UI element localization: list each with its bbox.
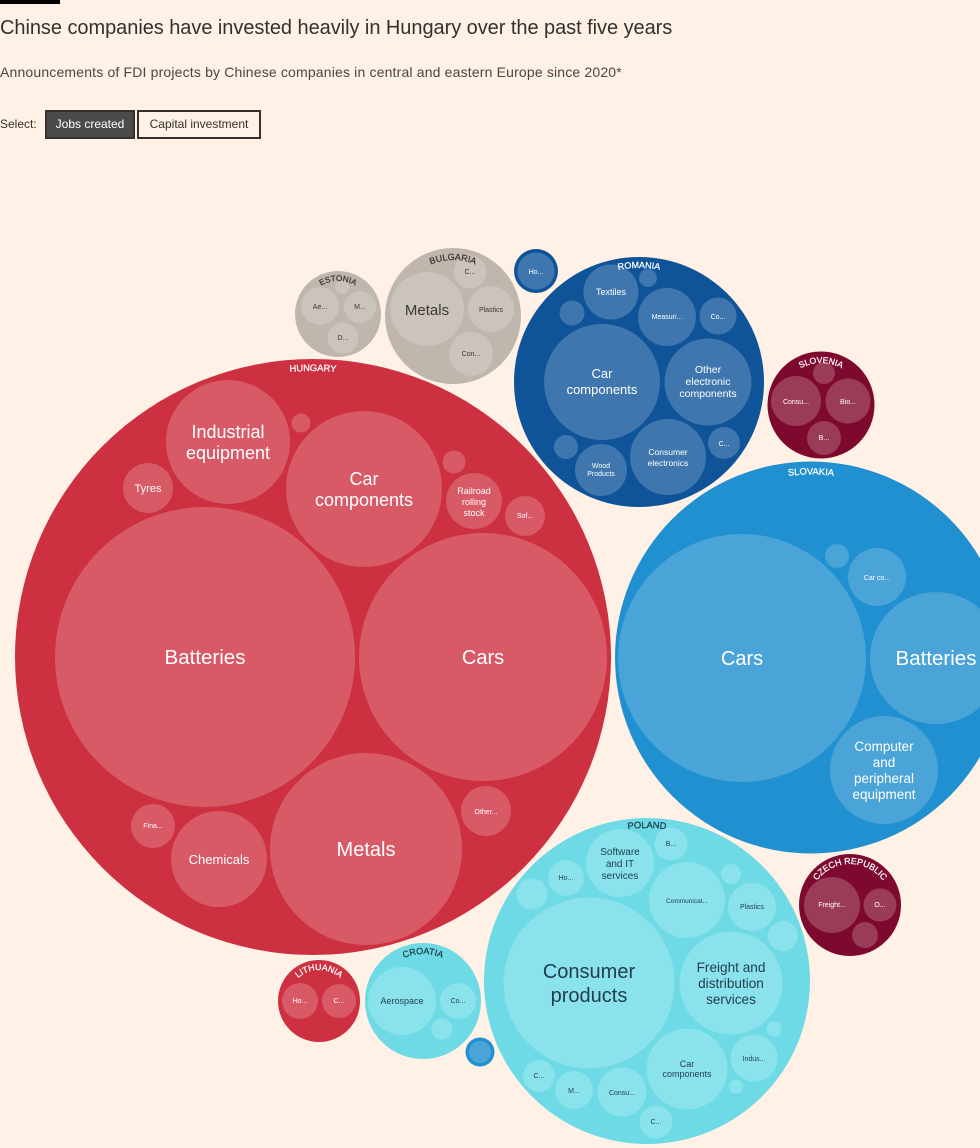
sector: B: B... (666, 841, 676, 848)
sector: Finance: Fina... (143, 823, 163, 830)
sector: Other electronic components: components (679, 388, 737, 400)
label: HUNGARY: HUNGARY (290, 364, 337, 372)
country: Slovenia (768, 352, 874, 458)
sector: Measuring: Measuri... (652, 314, 682, 321)
sector: Freight and distribution services: services (706, 992, 756, 1007)
sector: Car components (646, 1028, 728, 1110)
sector: Co: Co... (711, 314, 725, 321)
small sector bubble (852, 922, 878, 948)
sector: Batteries (55, 507, 355, 807)
sector: Computer and peripheral equipment (830, 716, 938, 824)
sector: Batteries: Batteries (165, 646, 245, 669)
country: Hungary (15, 359, 611, 955)
country bubble: Ho (dark blue): Ho... (529, 269, 543, 276)
sector: Car components: components (315, 490, 413, 510)
label: BULGARIA: BULGARIA (429, 254, 476, 265)
sector: Freight and distribution services: distribution (698, 976, 764, 991)
sector: Software: Sof... (517, 513, 533, 520)
sector: Consumer (598, 1068, 646, 1116)
sector: Communications: Communicat... (666, 898, 708, 905)
sector: Industrial equipment: Industrial (191, 422, 265, 442)
sector: Batteries: Batteries (896, 647, 976, 670)
sector: Car components: components (662, 1069, 712, 1079)
sector: Consumer: Consu... (783, 399, 809, 406)
sector: Consumer: Con... (462, 351, 480, 358)
sector: Tyres: Tyres (135, 483, 162, 495)
country: Czech Republic (799, 854, 901, 956)
small sector bubbles (292, 414, 466, 474)
sector: D: D... (338, 335, 348, 342)
label: CROATIA: CROATIA (402, 948, 442, 958)
sector: Car components (544, 324, 660, 440)
sector: Railroad rolling stock: stock (463, 508, 485, 518)
sector: Measuring (638, 288, 696, 346)
sector: Industrial equipment: equipment (186, 443, 270, 463)
sector: Consumer products: products (551, 985, 627, 1007)
button: jobs created (45, 110, 135, 139)
sector: Car components (848, 548, 906, 606)
small sector bubbles (516, 864, 798, 1094)
sector: O: O... (874, 902, 886, 909)
sector: Ho: Ho... (293, 998, 307, 1005)
sector: Consumer electronics: electronics (648, 458, 688, 468)
label: SLOVENIA: SLOVENIA (798, 356, 842, 368)
sector: Chemicals (171, 811, 267, 907)
top accent bar (0, 0, 60, 4)
sector: Railroad rolling stock: Railroad (457, 486, 491, 496)
sector: Industrial: Indus... (743, 1056, 766, 1063)
sector: Textiles: Textiles (596, 287, 627, 297)
sector: Ho: Ho... (559, 875, 573, 882)
sector: C: C... (334, 998, 344, 1005)
sector: Cars: Cars (462, 647, 504, 669)
select label: Select: (0, 117, 37, 131)
sector: Cars: Cars (721, 648, 763, 670)
sector: Cars (618, 534, 866, 782)
sector: B: B... (819, 435, 829, 442)
small sector bubble (432, 1018, 452, 1040)
label: ESTONIA: ESTONIA (318, 275, 356, 286)
label: LITHUANIA: LITHUANIA (294, 964, 342, 978)
sector: Computer and peripheral equipment: and (873, 755, 895, 770)
sector: Consumer electronics (630, 419, 706, 495)
country: Croatia (365, 943, 481, 1059)
sector: C (708, 427, 740, 459)
sector: Car components: Car (592, 366, 613, 381)
sector: Aerospace: Ae... (313, 304, 327, 311)
label: SLOVAKIA: SLOVAKIA (788, 468, 834, 476)
sector: Computer and peripheral equipment: Computer (854, 739, 914, 754)
sector: C left: C... (534, 1073, 544, 1080)
title: Chinse companies have invested heavily in Hungary over the past five years (0, 17, 672, 39)
sector: Other: Other... (475, 809, 498, 816)
sector: Plastics: Plastics (479, 307, 504, 314)
sector: Car components (286, 411, 442, 567)
sector: Consumer: Consu... (609, 1090, 635, 1097)
sector: Software and IT services: services (602, 871, 638, 882)
sector: Plastics: Plastics (740, 904, 765, 911)
sector: Tyres (123, 463, 173, 513)
sector: C bottom (640, 1106, 672, 1138)
sector: Wood Products: Wood (592, 463, 610, 470)
sector: Other electronic components: Other (695, 364, 722, 376)
sector: Co (700, 298, 736, 334)
sector: M: M... (354, 304, 366, 311)
sector: Finance (131, 804, 175, 848)
sector: Metals (270, 753, 462, 945)
sector: C: C... (465, 269, 475, 276)
small sector bubble (335, 280, 349, 294)
sector: Freight and distribution services: Freight and (697, 960, 765, 975)
sector: Plastics (728, 883, 776, 931)
sector: Car components: components (567, 382, 638, 397)
sector: B (654, 828, 688, 860)
sector: Cars (359, 533, 607, 781)
small sector bubble (813, 362, 835, 384)
button: capital investment (137, 110, 261, 139)
sector: Other electronic components (664, 338, 752, 426)
sector: Software and IT services (586, 829, 654, 897)
country: Poland (484, 818, 810, 1144)
sector: Batteries (870, 592, 980, 724)
sector: Software and IT services: and IT (606, 859, 634, 870)
sector: C bottom: C... (651, 1119, 661, 1126)
small sector bubble (825, 544, 849, 568)
sector: M: M... (568, 1088, 580, 1095)
sector: Industrial equipment (166, 380, 290, 504)
sector: C left (523, 1060, 555, 1092)
sector: Computer and peripheral equipment: equipment (852, 787, 916, 802)
sector: C: C... (719, 441, 729, 448)
sector: Consumer products: Consumer (543, 961, 635, 983)
sector: Textiles (584, 264, 638, 320)
sector: Bio: Bio... (840, 399, 856, 406)
sector: Co: Co... (451, 998, 465, 1005)
sector: Railroad rolling stock (446, 473, 502, 529)
country: Estonia (295, 271, 381, 357)
sector: Chemicals: Chemicals (189, 852, 250, 867)
small sector bubbles (554, 269, 657, 459)
sector: Metals: Metals (337, 839, 395, 861)
sector: Freight and distribution services (680, 932, 782, 1034)
label: POLAND: POLAND (628, 822, 666, 830)
country bubble: Ho (dark blue) (514, 249, 558, 293)
sector: Other electronic components: electronic (686, 376, 730, 388)
country: Lithuania (278, 960, 360, 1042)
sector: Freight: Freight... (818, 902, 846, 909)
sector: Consumer products (504, 898, 674, 1068)
sector: Car components: Car (680, 1059, 694, 1069)
country: Romania (514, 257, 764, 507)
button: capital investment: Capital investment (150, 117, 248, 131)
label: CZECH REPUBLIC: CZECH REPUBLIC (814, 858, 887, 880)
sector: Wood Products (575, 444, 627, 496)
label: ROMANIA: ROMANIA (618, 262, 660, 270)
country: Bulgaria (385, 248, 521, 384)
sector: Car components: Car co... (864, 575, 890, 582)
sector: Industrial (730, 1034, 778, 1082)
sector: Car components: Car (349, 469, 379, 489)
sector: Aerospace: Aerospace (380, 996, 424, 1006)
sector: Ho (548, 860, 584, 896)
sector: Computer and peripheral equipment: peripheral (854, 771, 914, 786)
sector: Railroad rolling stock: rolling (462, 497, 486, 507)
country bubble: small blue (466, 1038, 494, 1066)
country: Slovakia (615, 462, 980, 854)
sector: Software (505, 496, 545, 536)
button: jobs created: Jobs created (56, 117, 124, 131)
sector: Metals: Metals (405, 302, 449, 319)
subtitle: Announcements of FDI projects by Chinese companies in central and eastern Europe since 2020* (0, 64, 622, 80)
sector: Wood Products: Products (587, 471, 615, 478)
sector: Communications (649, 862, 725, 938)
sector: Software and IT services: Software (600, 847, 640, 858)
sector: Other (461, 786, 511, 836)
sector: Consumer electronics: Consumer (648, 447, 688, 457)
sector: M (555, 1071, 593, 1109)
